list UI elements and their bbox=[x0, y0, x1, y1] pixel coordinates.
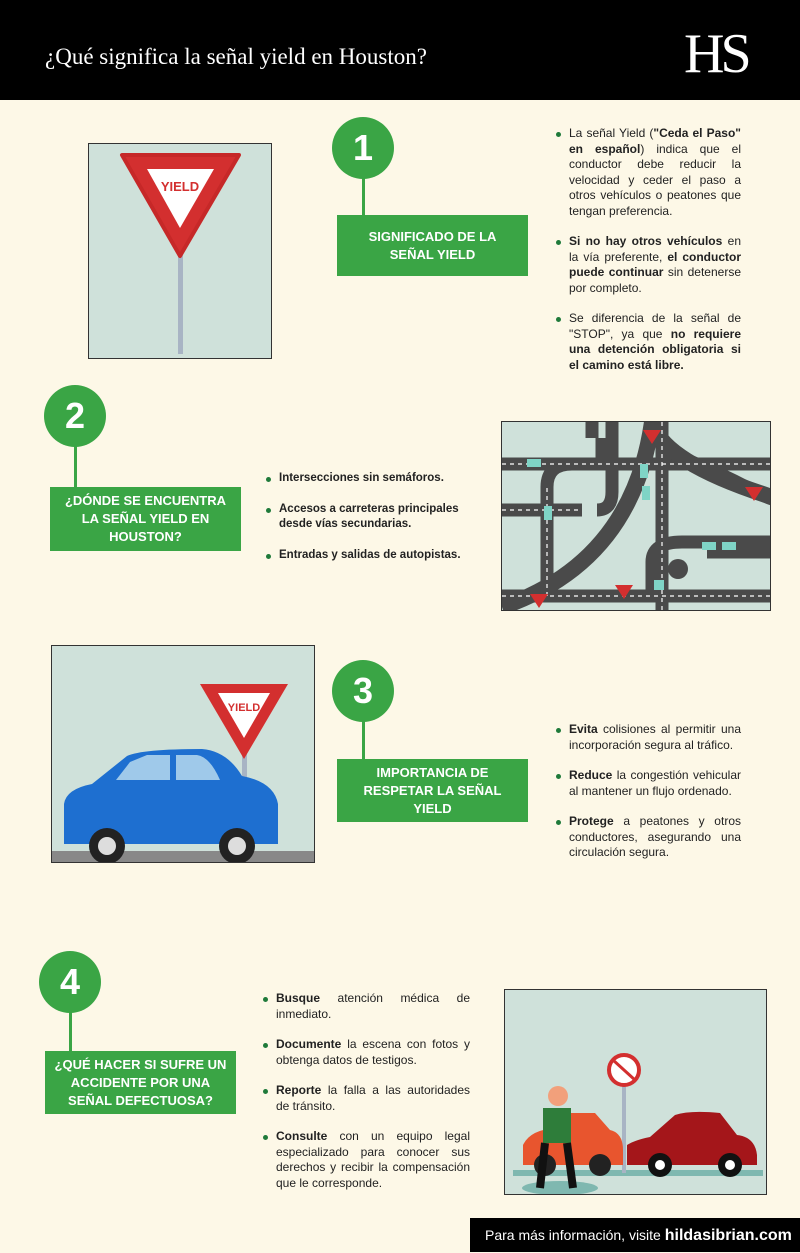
step 4 bullets: Busque atención médica de inmediato. bbox=[276, 991, 470, 1020]
step 1 label: SIGNIFICADO DE LA SEÑAL YIELD bbox=[369, 228, 496, 262]
step 4 label: ¿QUÉ HACER SI SUFRE UN ACCIDENTE POR UNA SEÑAL DEFECTUOSA? bbox=[55, 1056, 226, 1108]
step 2 bullets bbox=[266, 472, 461, 560]
step 4 bullets: Consulte con un equipo legal especializado para conocer sus derechos y recibir la compensación que le corresponde. bbox=[276, 1129, 470, 1190]
step 1 bullets bbox=[556, 126, 742, 372]
step 3 bullets bbox=[556, 722, 742, 859]
step 3 bullets: Reduce la congestión vehicular al mantener un flujo ordenado. bbox=[569, 768, 741, 798]
step 3 bullets: Protege a peatones y otros conductores, asegurando una circulación segura. bbox=[569, 814, 741, 859]
step 4 bullets: Documente la escena con fotos y obtenga datos de testigos. bbox=[276, 1037, 470, 1066]
step 2 bullets: Accesos a carreteras principales desde vías secundarias. bbox=[279, 502, 459, 530]
step 1 bullets: Si no hay otros vehículos en la vía preferente, el conductor puede continuar sin detenerse por completo. bbox=[569, 234, 741, 294]
step 4 bullets: Reporte la falla a las autoridades de tránsito. bbox=[276, 1083, 470, 1112]
logo: HS bbox=[684, 23, 748, 85]
step 2 bullets: Intersecciones sin semáforos. bbox=[279, 472, 444, 484]
step 3 circle: 3 bbox=[353, 670, 373, 711]
panel 1 image: yield sign: YIELD bbox=[161, 179, 199, 194]
footer bbox=[470, 1218, 800, 1252]
step 4 bullets bbox=[263, 991, 470, 1190]
header bbox=[0, 0, 800, 100]
step 3 bullets: Evita colisiones al permitir una incorporación segura al tráfico. bbox=[569, 722, 741, 752]
accident image bbox=[504, 989, 767, 1195]
step 2 label: ¿DÓNDE SE ENCUENTRA LA SEÑAL YIELD EN HOUSTON? bbox=[65, 493, 226, 544]
footer: Para más información, visite hildasibrian.com bbox=[485, 1227, 792, 1244]
step 2 circle: 2 bbox=[65, 395, 85, 436]
step 2 circle bbox=[44, 385, 106, 447]
step 2 bullets: Entradas y salidas de autopistas. bbox=[279, 548, 461, 560]
panel 3 image: car and yield sign bbox=[51, 645, 315, 863]
step 4 circle: 4 bbox=[60, 961, 80, 1002]
step 2 label bbox=[50, 487, 241, 551]
step 4 circle bbox=[39, 951, 101, 1013]
step 1 circle: 1 bbox=[353, 127, 373, 168]
step 3 label: IMPORTANCIA DE RESPETAR LA SEÑAL YIELD bbox=[364, 764, 501, 816]
panel 1 image: yield sign bbox=[88, 143, 272, 359]
step 1 bullets: Se diferencia de la señal de "STOP", ya que no requiere una detención obligatoria si el camino está libre. bbox=[569, 311, 741, 372]
step 3 label bbox=[337, 759, 528, 822]
step 1 bullets: La señal Yield ("Ceda el Paso" en español) indica que el conductor debe reducir la velocidad y ceder el paso a otros vehículos o peatones que tengan preferencia. bbox=[569, 126, 741, 218]
step 3 circle bbox=[332, 660, 394, 722]
panel 3 image: car and yield sign: YIELD bbox=[228, 702, 260, 714]
step 1 circle bbox=[332, 117, 394, 179]
step 1 label bbox=[337, 215, 528, 276]
map image bbox=[501, 421, 771, 611]
title: ¿Qué significa la señal yield en Houston? bbox=[45, 44, 427, 69]
